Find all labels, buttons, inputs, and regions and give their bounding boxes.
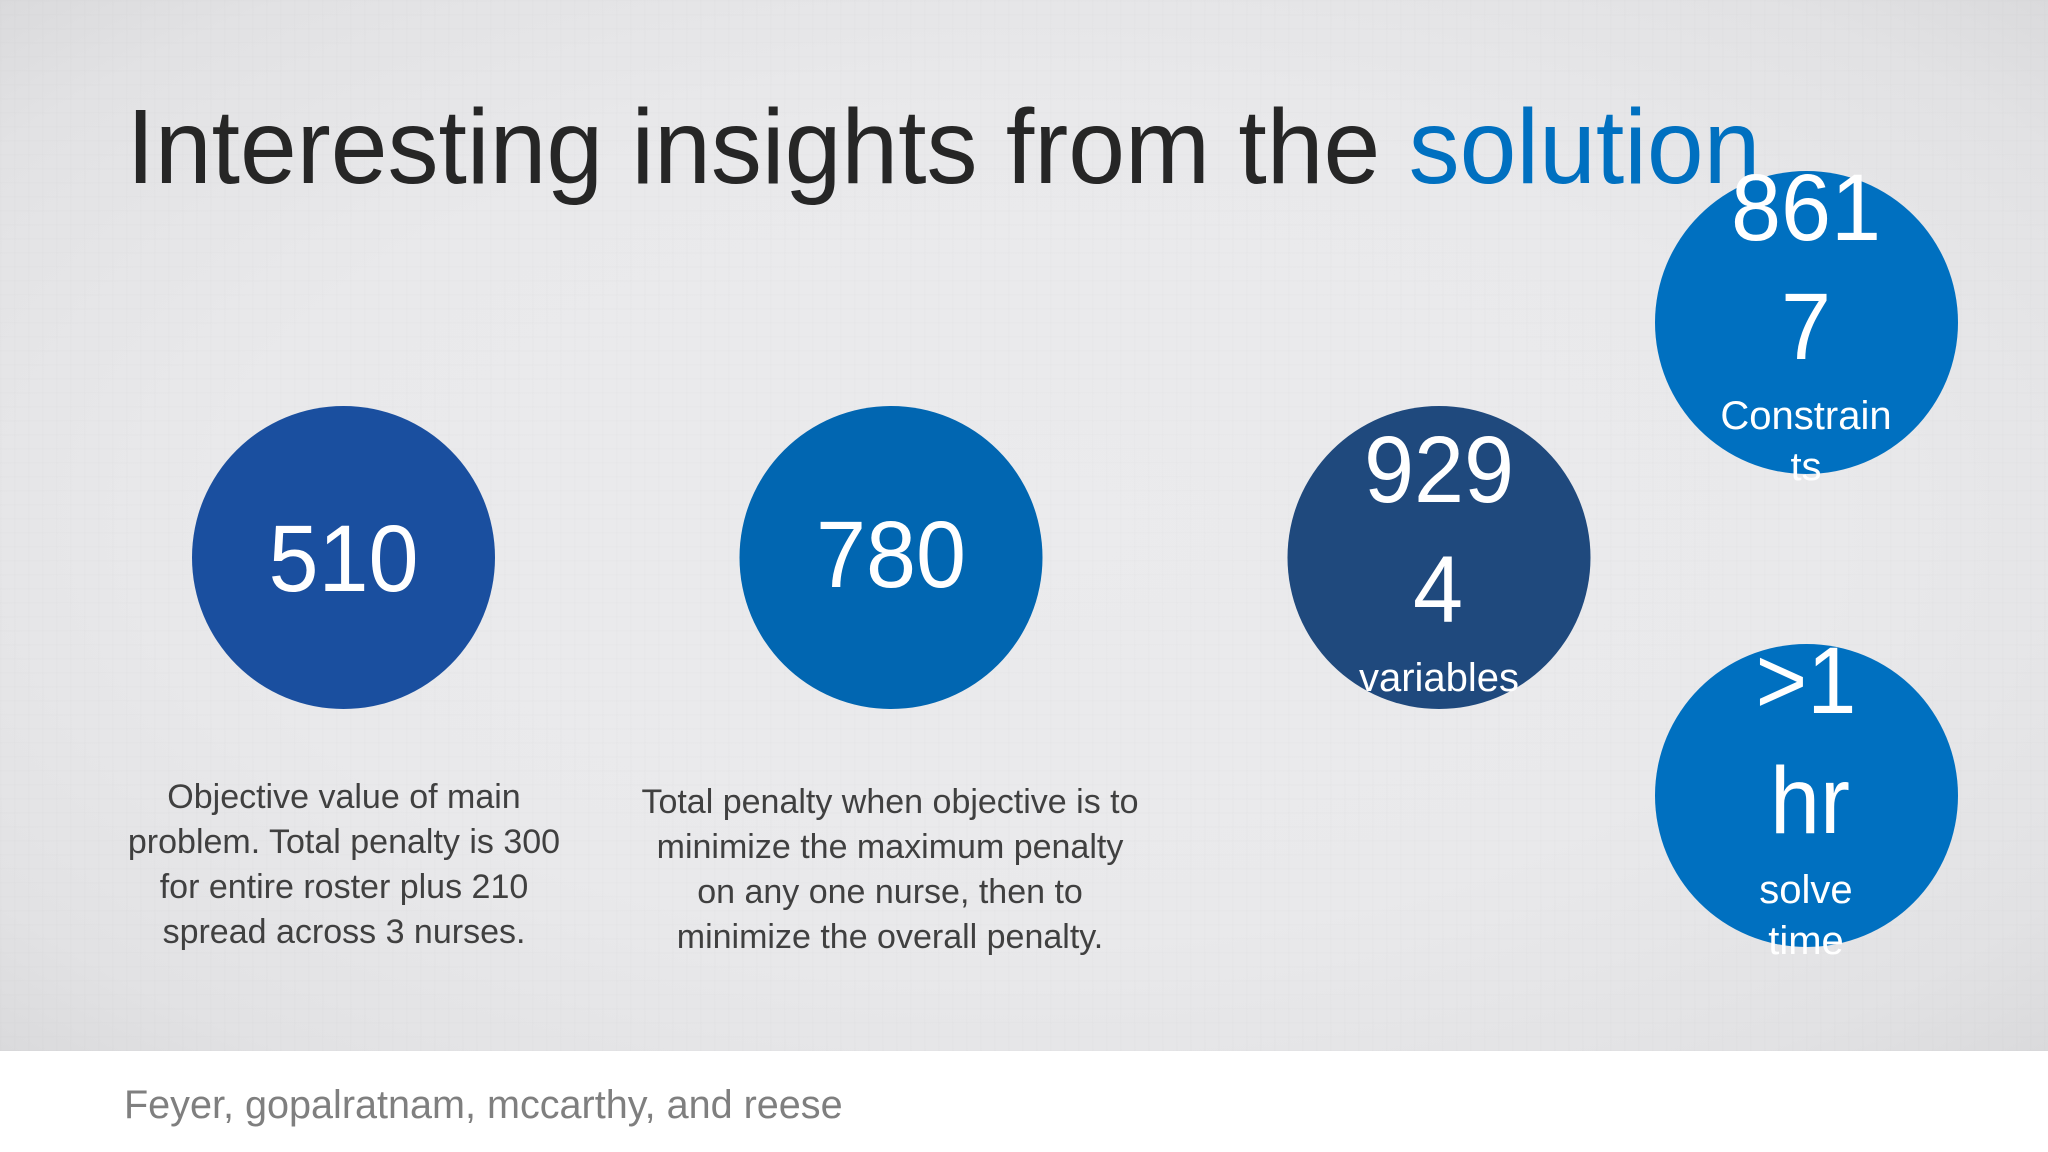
circle: 9294 variables: 929 xyxy=(1364,416,1514,523)
footer band xyxy=(0,1051,2048,1152)
text block: objective value description: problem. Total penalty is 300 xyxy=(128,823,560,861)
text block: total penalty description: Total penalty when objective is to xyxy=(641,783,1139,821)
circle: 9294 variables: 4 xyxy=(1413,536,1463,643)
circle: 510 objective value xyxy=(192,406,495,709)
circle: 8617 constraints: 7 xyxy=(1781,273,1831,380)
text block: objective value description: spread across 3 nurses. xyxy=(163,913,525,951)
circle: over 1 hr solve time xyxy=(1655,628,1958,963)
text block: total penalty description: minimize the maximum penalty xyxy=(657,828,1123,866)
text block: objective value description: for entire roster plus 210 xyxy=(160,868,528,906)
circle: over 1 hr solve time: hr xyxy=(1770,747,1850,854)
circle: 9294 variables: variables xyxy=(1359,656,1519,700)
text block: objective value description xyxy=(128,778,560,951)
circle: over 1 hr solve time: time xyxy=(1768,919,1844,963)
text block: objective value description: Objective value of main xyxy=(167,778,521,816)
circle: over 1 hr solve time: solve xyxy=(1759,868,1853,912)
footer credit: Feyer, gopalratnam, mccarthy, and reese xyxy=(124,1083,843,1127)
text block: total penalty description xyxy=(641,783,1139,956)
circle: 8617 constraints: ts xyxy=(1790,445,1822,489)
text block: total penalty description: on any one nurse, then to xyxy=(697,873,1083,911)
circle: 780 total penalty: 780 xyxy=(816,501,966,608)
circle: 8617 constraints: 861 xyxy=(1731,154,1881,261)
circle: 8617 constraints: Constrain xyxy=(1720,394,1892,438)
title: Interesting insights from the solution xyxy=(126,88,1760,206)
circle: over 1 hr solve time: >1 xyxy=(1756,628,1856,734)
circle: 510 objective value: 510 xyxy=(268,505,419,612)
circle: 780 total penalty xyxy=(740,406,1042,709)
circle: 8617 constraints xyxy=(1655,154,1958,489)
circle: 9294 variables xyxy=(1288,406,1590,709)
text block: total penalty description: minimize the overall penalty. xyxy=(677,918,1103,956)
